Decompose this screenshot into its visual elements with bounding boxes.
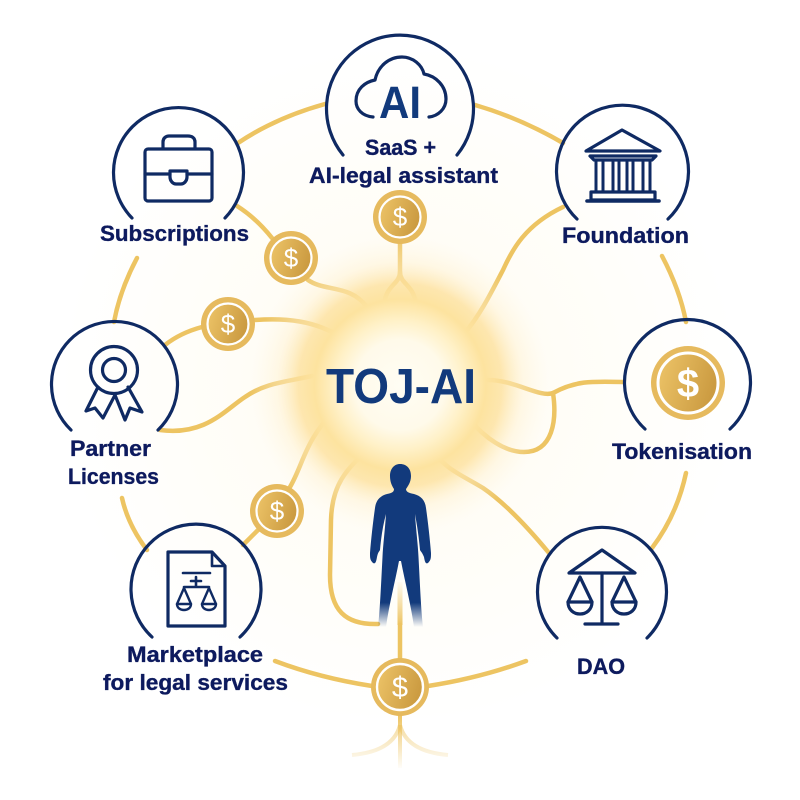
icon: award rosette: [86, 346, 142, 420]
connector lines to hub: [160, 206, 623, 624]
coin: top: [373, 190, 427, 244]
label: Marketplace: [127, 642, 263, 667]
label: Partner: [70, 436, 151, 461]
central glow: [250, 235, 550, 535]
node: SaaS + AI-legal assistant: AI-legal assistant: [309, 163, 499, 188]
node: Tokenisation: [612, 319, 752, 464]
node: Foundation: [556, 105, 689, 248]
person silhouette: [370, 464, 431, 627]
icon: AI cloud: [356, 57, 446, 128]
coin: bottom: [371, 658, 429, 716]
title: TOJ-AI: [326, 360, 476, 414]
coin: lower left: $: [270, 496, 285, 526]
label: DAO: [577, 654, 625, 679]
coin: bottom: $: [392, 672, 408, 704]
stem between the legs: [398, 582, 402, 625]
coin: top: $: [393, 202, 408, 232]
label: Subscriptions: [100, 221, 249, 246]
icon: temple: [586, 130, 660, 201]
icon: legal document: [168, 552, 225, 626]
node: Partner Licenses: Licenses: [68, 464, 159, 489]
label: Foundation: [562, 223, 689, 248]
node: SaaS + AI-legal assistant: [309, 35, 499, 188]
node: Subscriptions: [100, 108, 249, 246]
node: DAO: [538, 527, 667, 679]
faded roots below bottom coin: [352, 715, 448, 768]
coin: upper left: [264, 231, 318, 285]
icon: AI cloud: AI: [379, 77, 421, 128]
coin: left: [201, 297, 255, 351]
label: SaaS +: [365, 135, 436, 160]
icon: briefcase: [145, 136, 212, 201]
coin: lower left: [250, 484, 304, 538]
icon: scales: [568, 550, 636, 624]
coin: upper left: $: [284, 243, 299, 273]
stem down to coin: [398, 625, 402, 660]
node: Partner Licenses: [52, 321, 178, 489]
coin: left: $: [221, 309, 236, 339]
icon: coin: $: [677, 362, 699, 406]
icon: coin: [651, 346, 725, 420]
outer ring segments: [114, 104, 686, 686]
node: Marketplace for legal services: [103, 524, 288, 695]
node: Marketplace for legal services: for legal services: [103, 670, 288, 695]
label: Tokenisation: [612, 439, 752, 464]
